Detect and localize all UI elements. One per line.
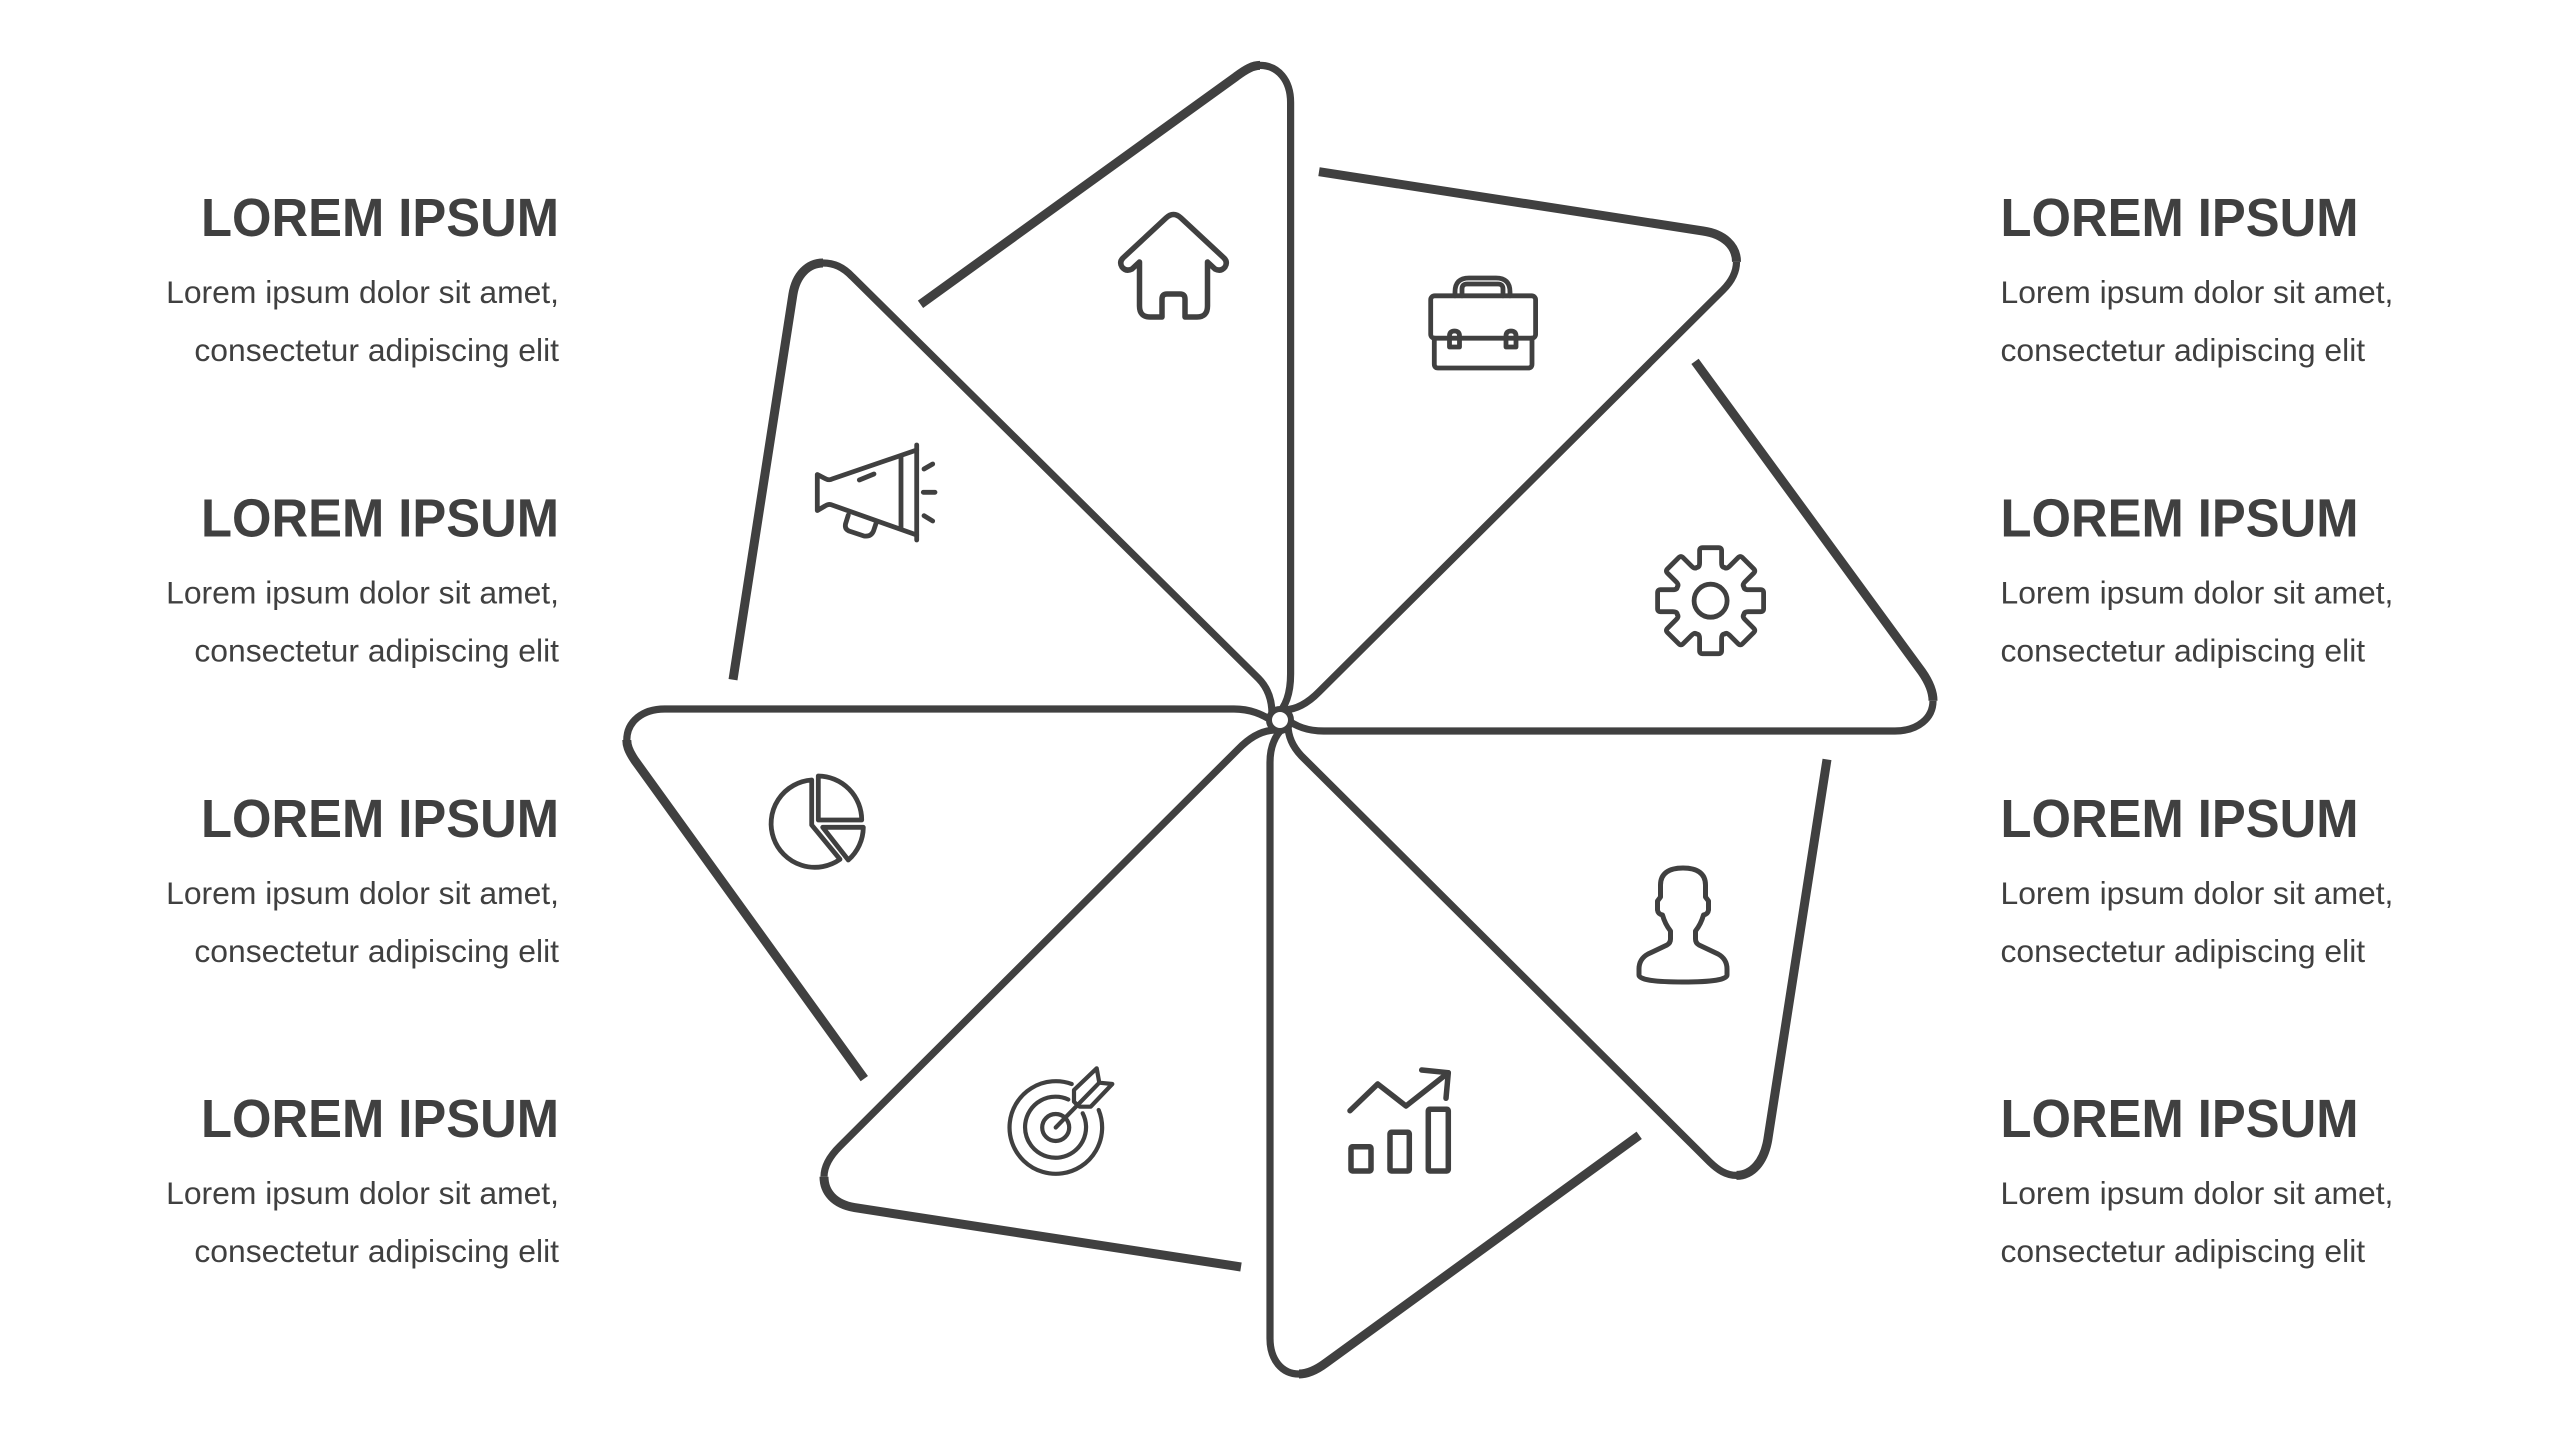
right text block 3: consectetur adipiscing elit xyxy=(2000,933,2365,969)
petal: home xyxy=(920,65,1291,716)
right text block 2: consectetur adipiscing elit xyxy=(2000,632,2365,668)
icon: briefcase xyxy=(1431,278,1536,368)
body text: Lorem ipsum dolor sit amet, xyxy=(166,1175,559,1211)
heading: LOREM IPSUM xyxy=(201,789,559,849)
heading: LOREM IPSUM xyxy=(2000,789,2358,849)
icon: person xyxy=(1639,868,1727,982)
heading: LOREM IPSUM xyxy=(201,1089,559,1149)
right text block 4: consectetur adipiscing elit xyxy=(2000,1233,2365,1269)
heading: LOREM IPSUM xyxy=(201,488,559,548)
heading: LOREM IPSUM xyxy=(201,188,559,248)
petal: briefcase xyxy=(1284,172,1736,710)
petal: gear xyxy=(1285,361,1933,731)
left text block 4: consectetur adipiscing elit xyxy=(194,1233,559,1269)
icon: megaphone xyxy=(817,445,935,540)
icon: gear xyxy=(1658,548,1764,654)
right text block 4 xyxy=(2000,1089,2393,1269)
right text block 1: consectetur adipiscing elit xyxy=(2000,332,2365,368)
icon: house xyxy=(1121,214,1226,317)
icon: target with arrow xyxy=(1010,1068,1112,1174)
centre hub xyxy=(1269,709,1291,731)
body text: Lorem ipsum dolor sit amet, xyxy=(166,875,559,911)
petal: growth chart xyxy=(1270,727,1639,1374)
body text: Lorem ipsum dolor sit amet, xyxy=(2000,875,2393,911)
left text block 2: consectetur adipiscing elit xyxy=(194,632,559,668)
body text: Lorem ipsum dolor sit amet, xyxy=(2000,274,2393,310)
right text block 2 xyxy=(2000,488,2393,668)
petal: pie chart xyxy=(627,709,1274,1079)
icon: pie chart xyxy=(771,776,863,867)
left text block 1: consectetur adipiscing elit xyxy=(194,332,559,368)
left text block 2 xyxy=(166,488,559,668)
right text block 3 xyxy=(2000,789,2393,969)
petal: megaphone xyxy=(733,263,1272,714)
body text: Lorem ipsum dolor sit amet, xyxy=(166,274,559,310)
left text block 3 xyxy=(166,789,559,969)
petal: person xyxy=(1288,725,1827,1175)
heading: LOREM IPSUM xyxy=(2000,488,2358,548)
left text block 1 xyxy=(166,188,559,368)
left text block 3: consectetur adipiscing elit xyxy=(194,933,559,969)
petal: target xyxy=(824,730,1276,1267)
heading: LOREM IPSUM xyxy=(2000,1089,2358,1149)
body text: Lorem ipsum dolor sit amet, xyxy=(2000,574,2393,610)
left text block 4 xyxy=(166,1089,559,1269)
right text block 1 xyxy=(2000,188,2393,368)
heading: LOREM IPSUM xyxy=(2000,188,2358,248)
body text: Lorem ipsum dolor sit amet, xyxy=(2000,1175,2393,1211)
icon: bar chart with rising arrow xyxy=(1350,1070,1448,1171)
body text: Lorem ipsum dolor sit amet, xyxy=(166,574,559,610)
